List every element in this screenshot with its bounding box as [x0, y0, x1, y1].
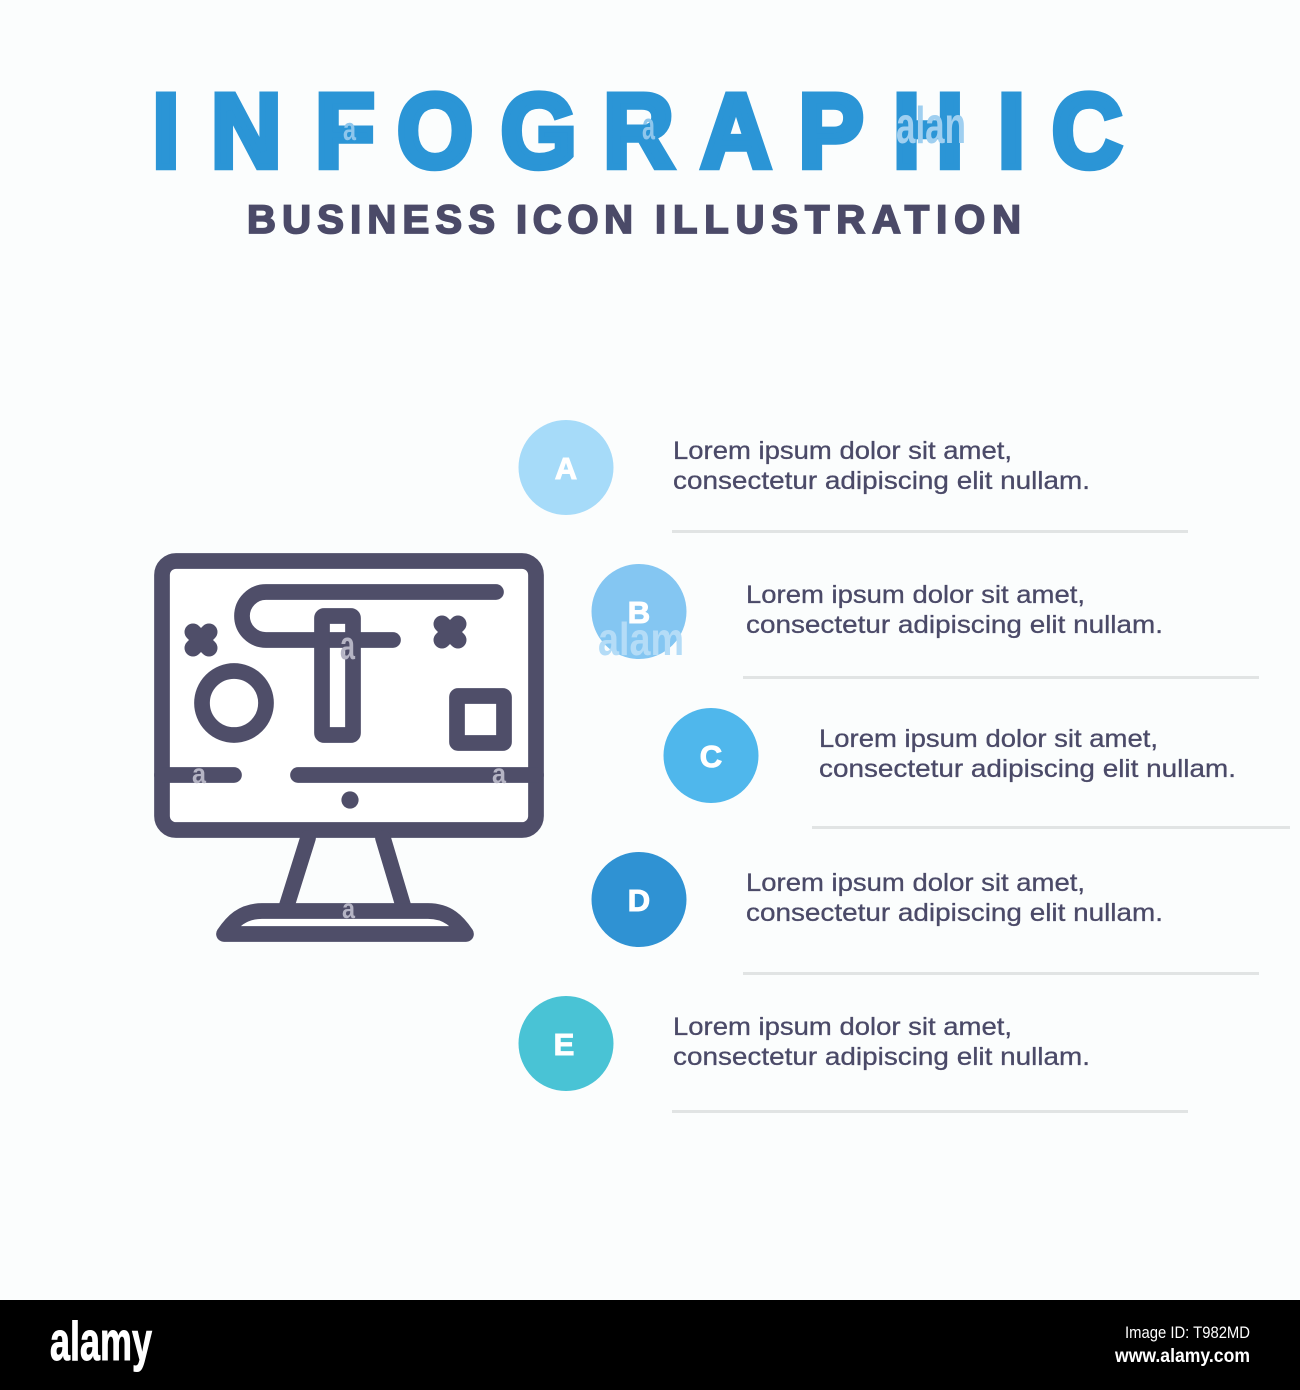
item B: Lorem ipsum dolor sit amet, — [746, 581, 1085, 609]
watermark marks on title and icon: a — [343, 111, 356, 147]
item D: D — [628, 883, 650, 918]
item B — [592, 564, 1259, 679]
watermark marks on title and icon: a — [340, 624, 356, 668]
item A — [518, 420, 1188, 533]
watermark marks on title and icon: a — [192, 758, 206, 789]
item E — [518, 996, 1188, 1113]
item D: consectetur adipiscing elit nullam. — [746, 899, 1163, 927]
footer bar: Image ID: T982MD — [1125, 1323, 1250, 1342]
subtitle — [247, 198, 1021, 242]
item C: C — [700, 739, 722, 774]
item A: Lorem ipsum dolor sit amet, — [673, 437, 1012, 465]
title: INFOGRAPHIC — [152, 73, 1122, 190]
item B: consectetur adipiscing elit nullam. — [746, 611, 1163, 639]
footer bar — [0, 1300, 1300, 1390]
item C: consectetur adipiscing elit nullam. — [819, 755, 1236, 783]
item B: B — [628, 595, 650, 630]
item C: Lorem ipsum dolor sit amet, — [819, 725, 1158, 753]
watermark marks on title and icon: a — [642, 106, 656, 148]
item A: A — [555, 451, 577, 486]
subtitle: ICON — [516, 198, 633, 242]
icon: desktop monitor with strategy board — [162, 561, 536, 934]
watermark marks on title and icon — [192, 97, 966, 924]
item A: consectetur adipiscing elit nullam. — [673, 467, 1090, 495]
watermark marks on title and icon: alan — [896, 97, 966, 155]
watermark marks on title and icon: a — [492, 758, 506, 789]
item E: consectetur adipiscing elit nullam. — [673, 1043, 1090, 1071]
item E: E — [554, 1027, 574, 1062]
subtitle: ILLUSTRATION — [655, 198, 1021, 242]
footer bar: www.alamy.com — [1114, 1346, 1250, 1367]
item E: Lorem ipsum dolor sit amet, — [673, 1013, 1012, 1041]
subtitle: BUSINESS — [247, 198, 495, 242]
item D: Lorem ipsum dolor sit amet, — [746, 869, 1085, 897]
footer bar: alamy — [50, 1310, 152, 1372]
item B: alam — [598, 613, 684, 665]
watermark marks on title and icon: a — [342, 893, 355, 924]
item D — [592, 852, 1259, 975]
item C — [664, 708, 1290, 829]
